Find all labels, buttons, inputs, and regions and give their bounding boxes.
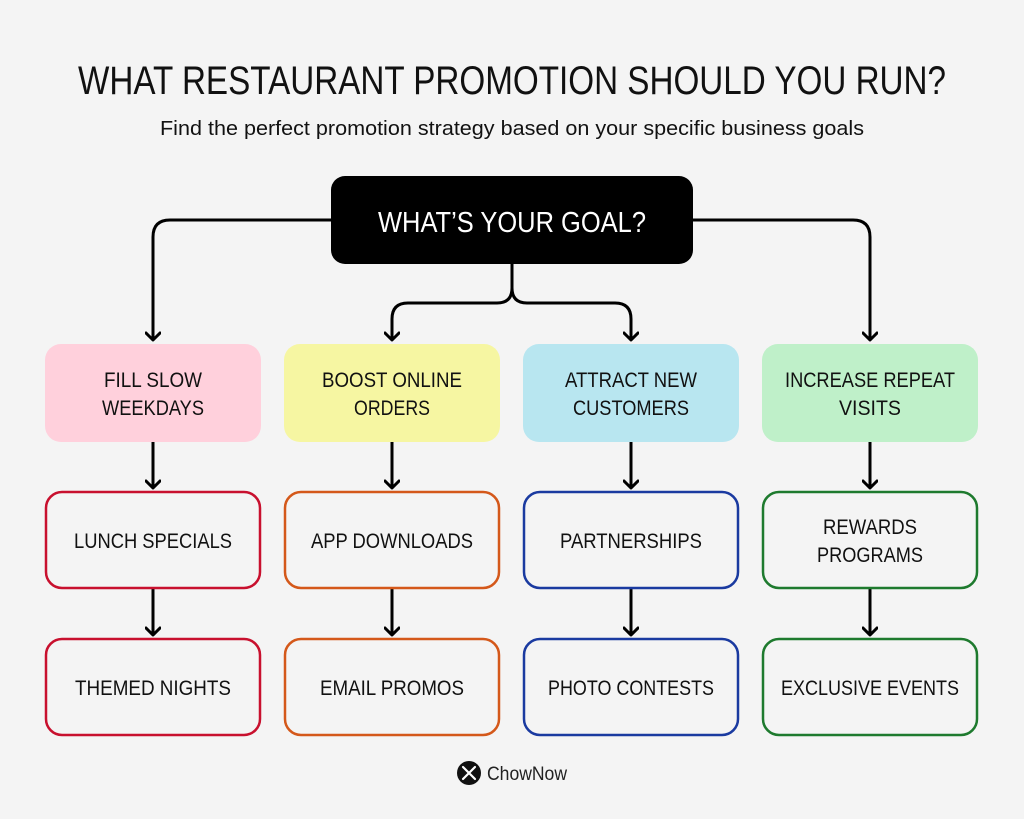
column: increase repeat visits: INCREASE REPEAT: [785, 369, 955, 392]
connectors from goal box: [153, 220, 870, 340]
column: fill slow weekdays: WEEKDAYS: [102, 397, 204, 420]
column: attract new customers: ATTRACT NEW: [565, 369, 697, 392]
column: fill slow weekdays: [45, 344, 261, 735]
column: boost online orders: ORDERS: [354, 397, 430, 420]
column: attract new customers: PARTNERSHIPS: [560, 530, 702, 553]
logo: ChowNow: ChowNow: [487, 764, 567, 785]
goal box: [331, 176, 693, 264]
subtitle: Find the perfect promotion strategy based on your specific business goals: [160, 118, 864, 140]
column: boost online orders: BOOST ONLINE: [322, 369, 462, 392]
column: attract new customers: CUSTOMERS: [573, 397, 689, 420]
column: boost online orders: [284, 344, 500, 735]
column: fill slow weekdays: LUNCH SPECIALS: [74, 530, 232, 553]
column: increase repeat visits: PROGRAMS: [817, 544, 923, 567]
column: attract new customers: PHOTO CONTESTS: [548, 677, 714, 700]
column: fill slow weekdays: FILL SLOW: [104, 369, 202, 392]
column: attract new customers: [523, 344, 739, 735]
column: boost online orders: EMAIL PROMOS: [320, 677, 464, 700]
column: increase repeat visits: [762, 344, 978, 735]
column arrows: [153, 442, 870, 635]
column: boost online orders: APP DOWNLOADS: [311, 530, 473, 553]
column: increase repeat visits: EXCLUSIVE EVENTS: [781, 677, 959, 700]
column: increase repeat visits: REWARDS: [823, 516, 917, 539]
logo: ChowNow: [457, 761, 567, 785]
goal box: WHAT’S YOUR GOAL?: [378, 207, 646, 239]
column: increase repeat visits: VISITS: [839, 397, 901, 420]
column: fill slow weekdays: THEMED NIGHTS: [75, 677, 231, 700]
